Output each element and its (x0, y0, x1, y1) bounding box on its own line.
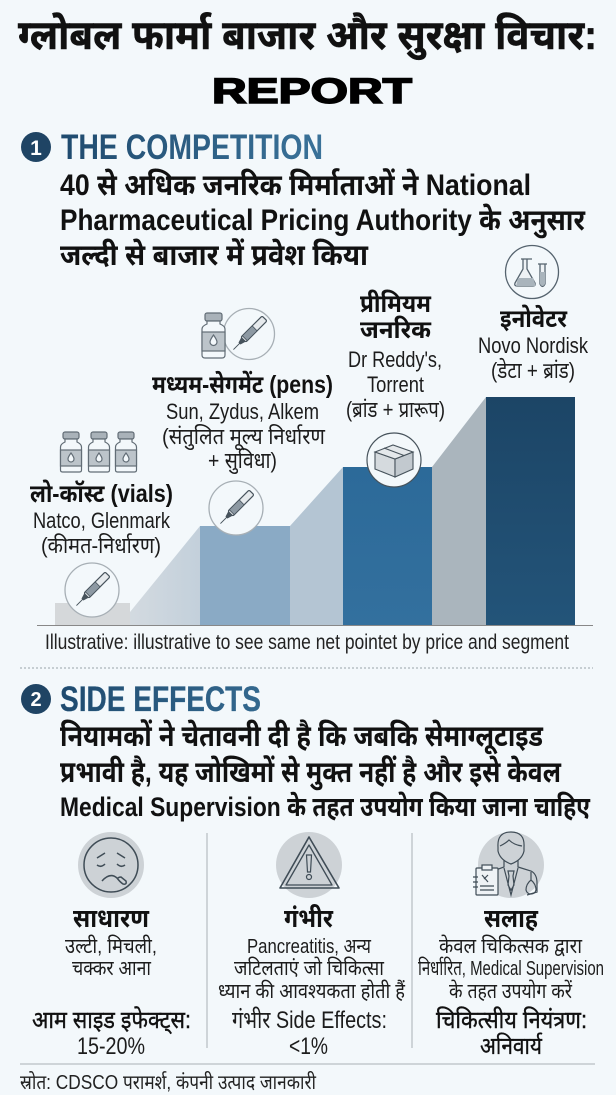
label: innovator tier (478, 304, 589, 383)
column: advice: केवल चिकित्सक द्वारा (439, 934, 583, 958)
icon: pen on mid bar (209, 481, 263, 535)
section 1 description: जल्दी से बाजार में प्रवेश किया (60, 237, 369, 272)
label: premium generic tier: (ब्रांड + प्रारूप) (346, 397, 445, 422)
label: innovator tier: (डेटा + ब्रांड) (491, 357, 575, 383)
column: advice: अनिवार्य (480, 1032, 543, 1060)
section 1 heading: THE COMPETITION (61, 128, 323, 167)
icon: three vials (60, 432, 136, 472)
column: common side effects: चक्कर आना (72, 957, 152, 980)
subtitle: report: REPORT (212, 72, 412, 111)
section 1 description: 40 से अधिक जनरिक मिर्माताओं ने National (60, 167, 531, 202)
section 2 description (60, 718, 591, 822)
label: mid segment tier: + सुविधा) (208, 448, 277, 475)
label: premium generic tier: प्रीमियम (360, 289, 432, 318)
label: mid segment tier: (संतुलित मूल्य निर्धारण (162, 424, 326, 451)
column: common side effects: साधारण (73, 903, 150, 933)
section 1 number badge: 1 (30, 137, 42, 160)
column: serious side effects (218, 903, 406, 1060)
section 1 number badge (21, 132, 51, 162)
icon: sad face (78, 832, 144, 898)
label: low cost tier: (कीमत-निर्धारण) (41, 533, 161, 558)
label: mid segment tier (152, 370, 333, 475)
section 2 number badge: 2 (30, 689, 42, 711)
staircase bar chart (37, 397, 593, 626)
label: premium generic tier: जनरिक (360, 315, 432, 344)
column: common side effects: आम साइड इफेक्ट्स: (32, 1006, 191, 1034)
icon: vial and pen (202, 308, 274, 360)
section 1 description (60, 167, 586, 272)
column: serious side effects: Pancreatitis, अन्य (247, 935, 372, 958)
section 2 description: नियामकों ने चेतावनी दी है कि जबकि सेमाग्लूटाइड (60, 718, 544, 755)
section 2 number badge (21, 684, 51, 714)
column: serious side effects: गंभीर Side Effects: (232, 1006, 387, 1034)
section 2 heading: SIDE EFFECTS (60, 680, 261, 719)
icon: pen on low cost bar (65, 563, 119, 617)
column: advice: सलाह (484, 903, 539, 933)
label: premium generic tier (346, 289, 445, 422)
label: mid segment tier: Sun, Zydus, Alkem (166, 399, 319, 424)
column: common side effects: उल्टी, मिचली, (65, 934, 157, 958)
column: advice: के तहत उपयोग करें (449, 979, 573, 1003)
column: serious side effects: ध्यान की आवश्यकता होती हैं (218, 979, 406, 1003)
icon: flask and test tube (506, 246, 558, 298)
icon: doctor (473, 832, 544, 898)
column: common side effects (32, 903, 191, 1060)
icon: warning triangle (276, 832, 342, 898)
label: innovator tier: Novo Nordisk (478, 333, 589, 358)
column: advice (418, 903, 604, 1060)
label: premium generic tier: Torrent (367, 372, 424, 397)
label: innovator tier: इनोवेटर (500, 304, 568, 333)
column: serious side effects: <1% (289, 1033, 328, 1060)
label: low cost tier (30, 479, 173, 558)
label: low cost tier: Natco, Glenmark (33, 508, 171, 533)
label: premium generic tier: Dr Reddy's, (348, 347, 442, 372)
label: mid segment tier: मध्यम-सेगमेंट (pens) (152, 370, 333, 399)
icon: box (367, 433, 421, 487)
column: advice: चिकित्सीय नियंत्रण: (436, 1006, 587, 1034)
source note: स्रोत: CDSCO परामर्श, कंपनी उत्पाद जानकारी (20, 1070, 317, 1094)
column: common side effects: 15-20% (77, 1033, 145, 1060)
label: low cost tier: लो-कॉस्ट (vials) (30, 479, 173, 508)
column: serious side effects: जटिलताएं जो चिकित्सा (234, 956, 385, 980)
column: serious side effects: गंभीर (284, 903, 333, 933)
